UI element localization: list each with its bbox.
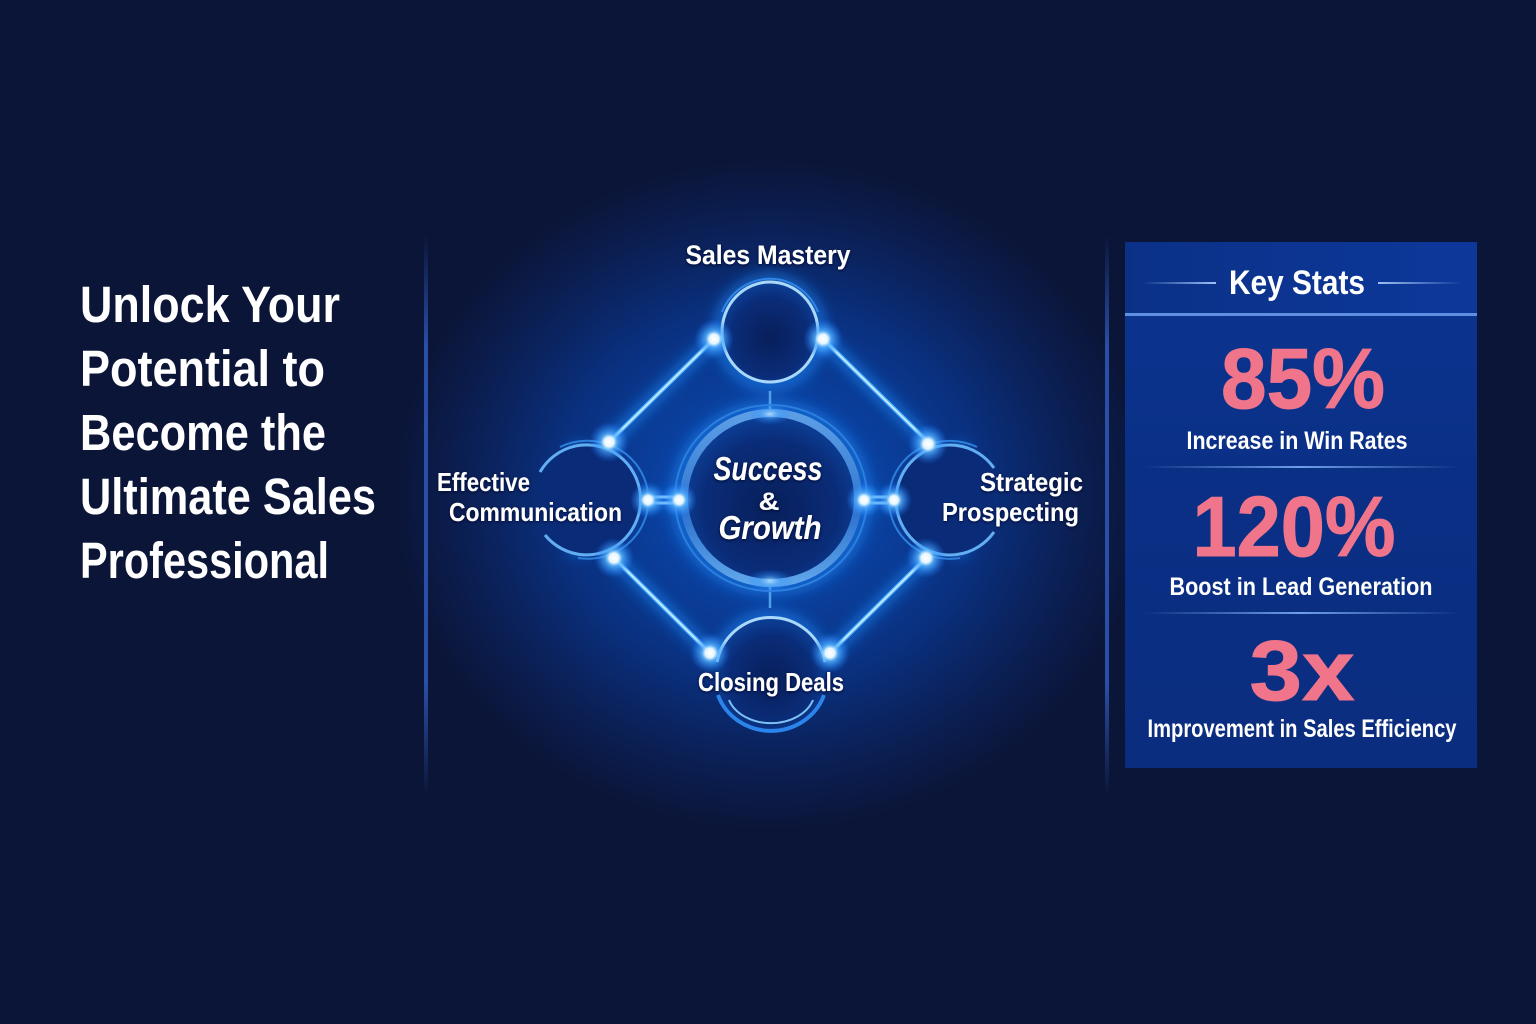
title: Become the — [80, 404, 326, 461]
panel header — [1125, 242, 1477, 316]
connector lines — [609, 339, 928, 653]
center label: & — [758, 488, 780, 516]
stat: 120%: 120% — [1192, 480, 1396, 575]
center label — [714, 450, 822, 546]
center label: Success — [714, 450, 822, 487]
title: Potential to — [80, 340, 325, 397]
title: Ultimate Sales — [80, 468, 376, 525]
node: effective communication — [540, 441, 648, 559]
right divider — [1105, 235, 1109, 795]
label: sales mastery: Sales Mastery — [686, 240, 850, 270]
diagram: success and growth — [437, 240, 1083, 731]
stat: 120% — [1170, 480, 1432, 601]
panel: key stats — [1125, 242, 1477, 768]
soft ring highlights — [746, 403, 794, 593]
title: Professional — [80, 532, 329, 589]
label: effective communication — [437, 467, 622, 527]
stat: 3x — [1148, 624, 1457, 743]
label: closing deals: Closing Deals — [698, 667, 844, 697]
label: strategic prospecting: Strategic — [980, 467, 1083, 497]
stat: 3x: 3x — [1250, 624, 1354, 719]
stat: 85%: 85% — [1221, 332, 1385, 427]
glowing nodes — [589, 319, 948, 673]
connector glow — [570, 280, 967, 662]
left divider — [424, 235, 428, 795]
node: closing deals — [717, 617, 825, 731]
stat: 85% — [1186, 332, 1408, 455]
node: strategic prospecting — [889, 441, 994, 559]
label: effective communication: Communication — [449, 497, 622, 527]
stat: 85%: Increase in Win Rates — [1186, 427, 1408, 455]
label: strategic prospecting: Prospecting — [942, 497, 1079, 527]
background glow behind diagram — [395, 160, 1145, 830]
stat: 120%: Boost in Lead Generation — [1170, 573, 1432, 601]
title — [80, 276, 376, 589]
label: strategic prospecting — [942, 467, 1083, 527]
title: Unlock Your — [80, 276, 340, 333]
panel header: Key Stats — [1229, 264, 1365, 302]
center label: Growth — [718, 509, 822, 546]
stat: 3x: Improvement in Sales Efficiency — [1148, 715, 1457, 743]
center circle — [675, 405, 867, 591]
node: sales mastery — [721, 279, 819, 383]
label: effective communication: Effective — [437, 467, 530, 497]
